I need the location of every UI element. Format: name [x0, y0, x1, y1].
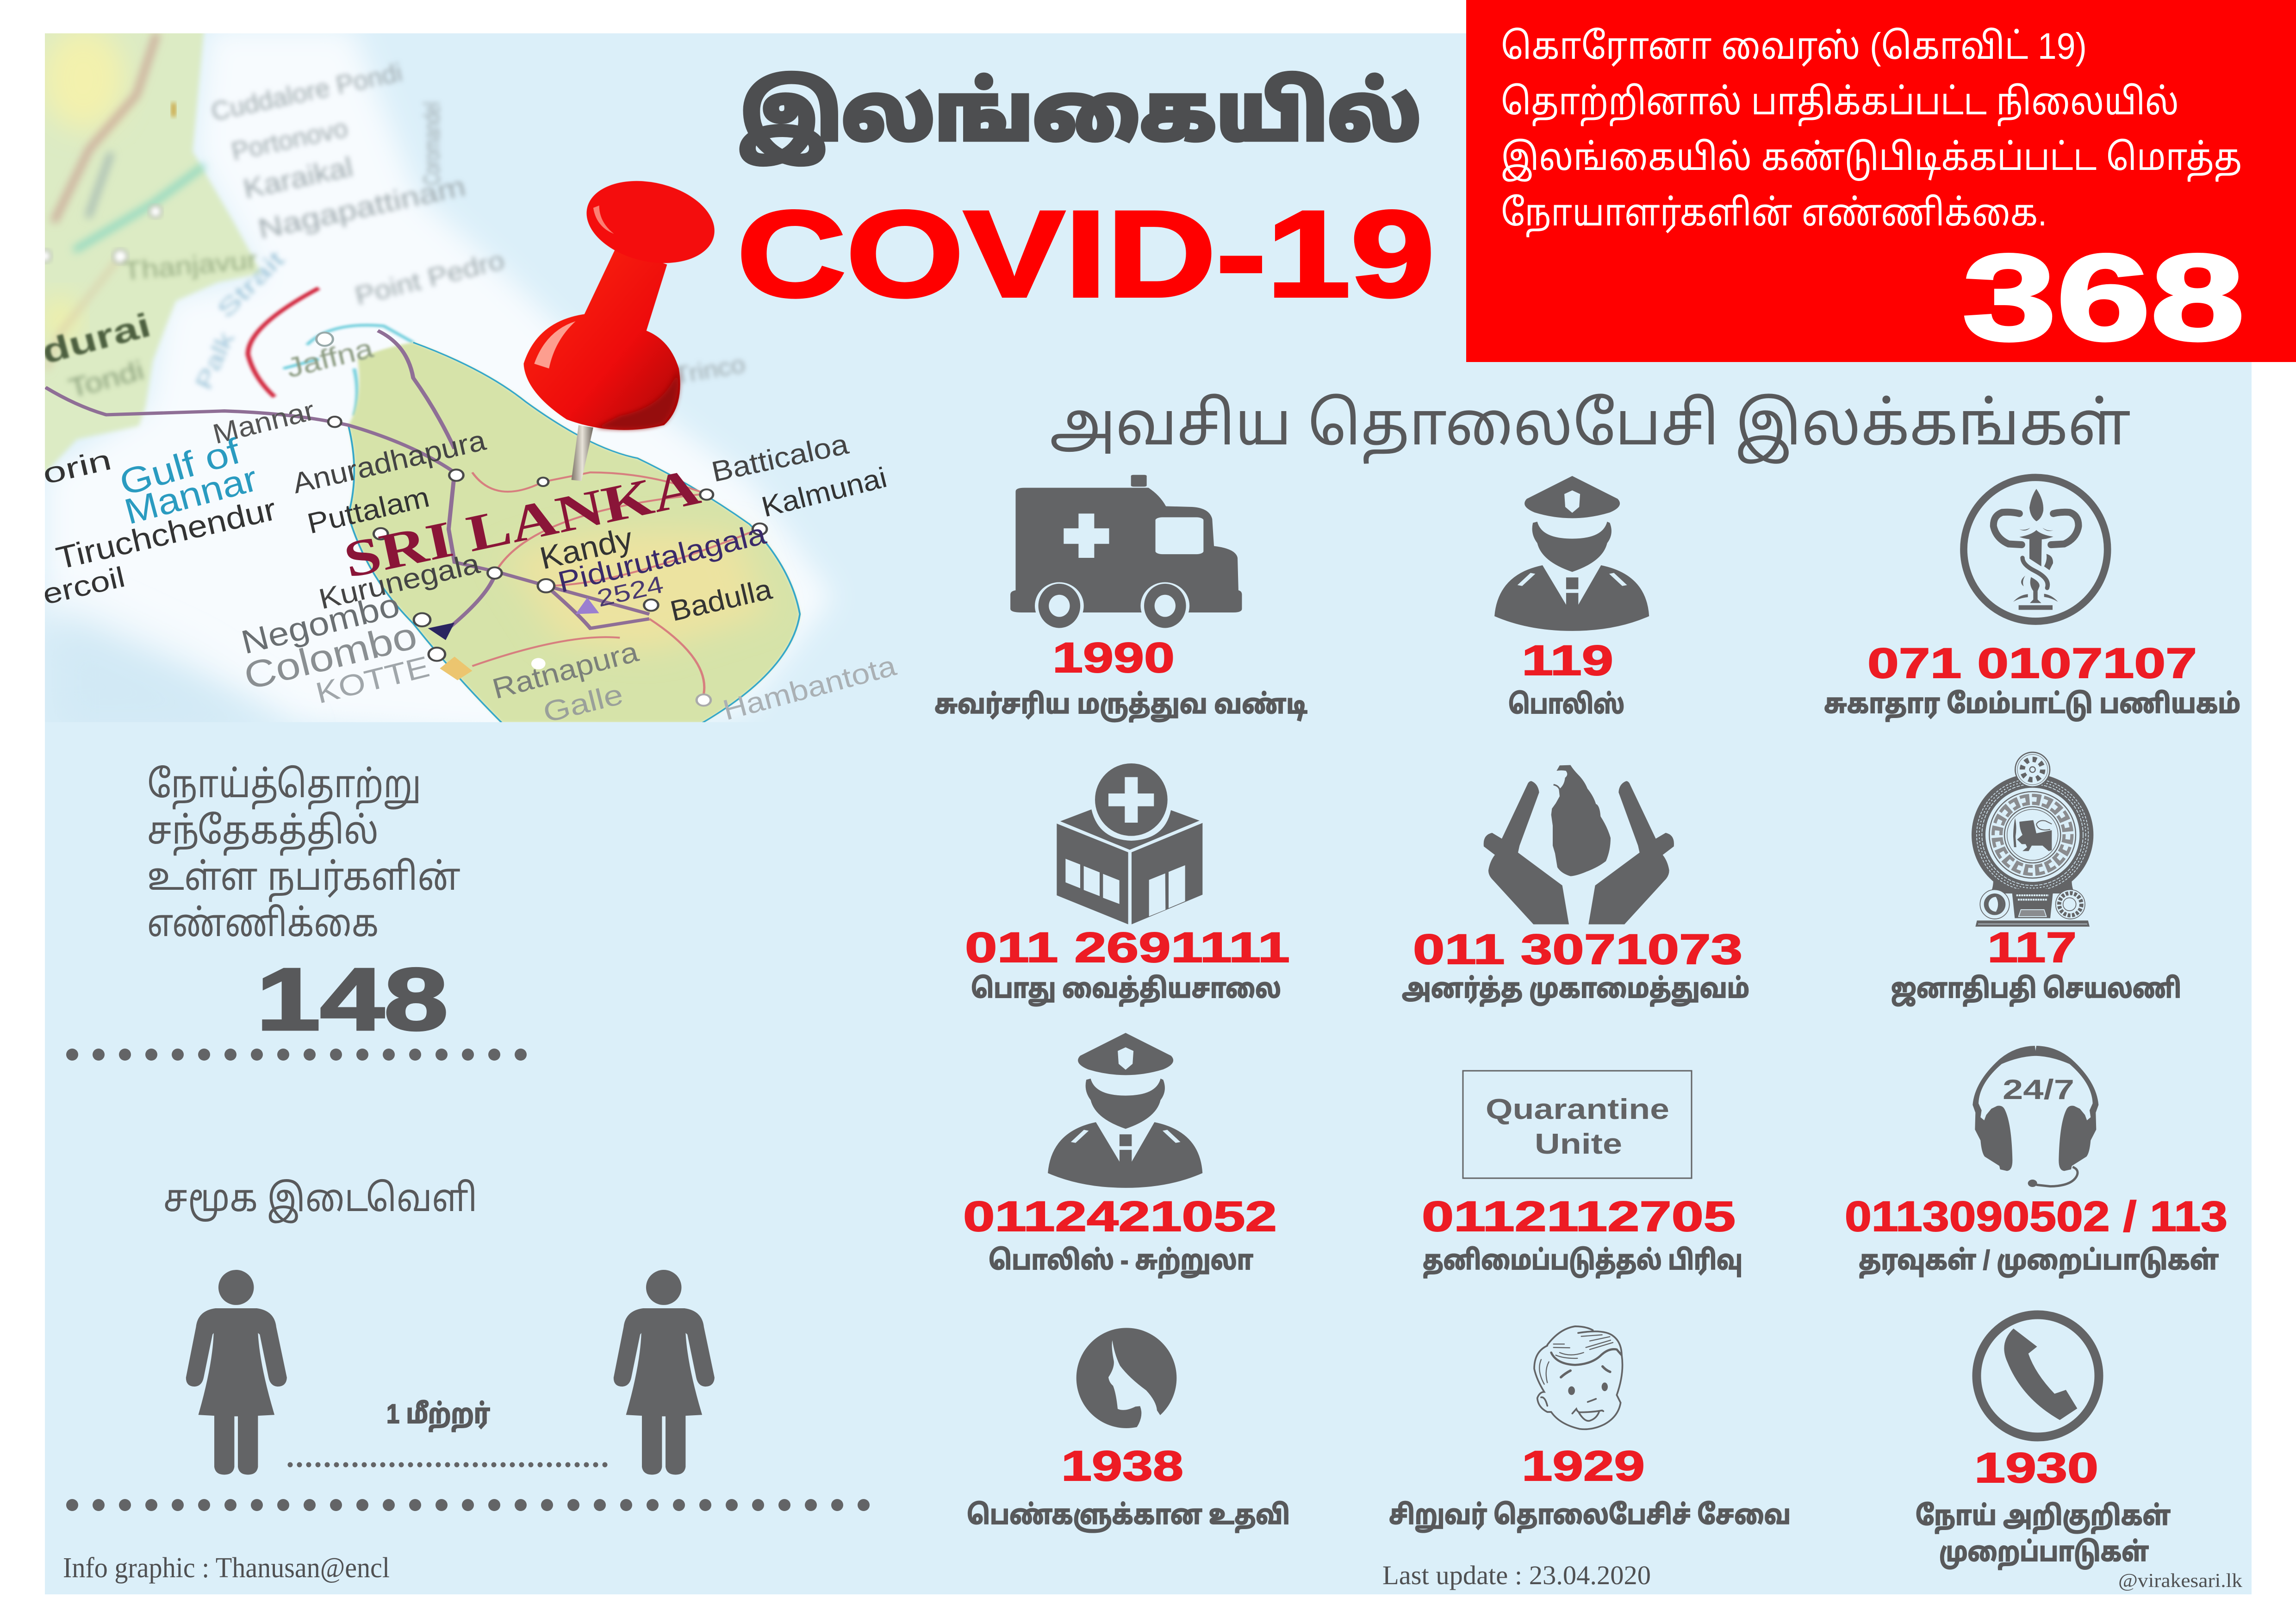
quarantine unit box: [1463, 1071, 1692, 1178]
label: ambulance: சுவர்சரிய மருத்துவ வண்டி: [934, 689, 1307, 722]
number: 117: 117: [1987, 924, 2077, 971]
icon: national emblem: [1972, 752, 2093, 927]
label: general hospital: பொது வைத்தியசாலை: [971, 974, 1281, 1006]
blurred place labels: Palk: [190, 327, 239, 394]
suspected persons label: நோய்த்தொற்று: [147, 763, 421, 810]
map labels: Anuradhapura: [290, 424, 489, 500]
panel: total cases red box: [1466, 0, 2296, 366]
heading: emergency numbers: அவசிய தொலைபேசி இலக்கங்கள்: [1050, 390, 2131, 464]
suspected persons label: எண்ணிக்கை: [147, 902, 379, 944]
blurred place labels: Trinco: [672, 351, 747, 390]
map labels: Mannar: [210, 394, 317, 450]
map labels: Jaffna: [283, 333, 376, 384]
label: quarantine unit: தனிமைப்படுத்தல் பிரிவு: [1423, 1245, 1742, 1278]
total cases description: இலங்கையில் கண்டுபிடிக்கப்பட்ட மொத்த: [1501, 137, 2242, 182]
label: health promotion bureau: சுகாதார மேம்பாட்டு பணியகம்: [1824, 689, 2240, 721]
quarantine unit box: Quarantine: [1486, 1093, 1669, 1125]
blurred place labels: Tondi: [66, 355, 147, 404]
label: child helpline: சிறுவர் தொலைபேசிச் சேவை: [1389, 1500, 1791, 1533]
map labels: Batticaloa: [709, 428, 852, 488]
blurred place labels: Portonovo: [229, 113, 350, 166]
icon: woman profile: [1076, 1328, 1176, 1429]
number: 0112112705: 0112112705: [1422, 1193, 1736, 1240]
suspected persons label: உள்ள நபர்களின்: [147, 856, 460, 902]
source handle: @virakesari.lk: [2118, 1570, 2242, 1592]
number: 071 0107107: 071 0107107: [1867, 640, 2197, 687]
map labels: durai: [37, 306, 155, 371]
blurred place labels: Strait: [212, 246, 289, 323]
number: 0113090502 / 113: 0113090502 / 113: [1845, 1193, 2228, 1240]
label: police tourism: பொலிஸ் - சுற்றுலா: [989, 1245, 1253, 1278]
map labels: ercoil: [40, 561, 128, 611]
map labels: Puttalam: [305, 481, 432, 540]
icon: caduceus in circle: [1964, 477, 2108, 621]
map labels: orin: [40, 444, 114, 491]
figure: woman right: [614, 1270, 715, 1474]
number: 011 2691111: 011 2691111: [965, 924, 1290, 971]
blurred place labels: Karaikal: [241, 151, 355, 205]
social distancing heading: சமூக இடைவெளி: [163, 1177, 477, 1223]
label: disaster management: அனர்த்த முகாமைத்துவம்: [1402, 974, 1749, 1006]
total cases description: [1501, 25, 2242, 237]
credit: info graphic: Info graphic : Thanusan@encl: [63, 1552, 390, 1584]
number: 1930: 1930: [1974, 1444, 2098, 1492]
distance label: 1 மீற்றர்: [386, 1399, 490, 1432]
suspected persons label: [147, 763, 460, 944]
map labels: Hambantota: [720, 650, 900, 727]
icon: 24/7 headset: 24/7: [2003, 1074, 2074, 1105]
map labels: Kandy: [536, 521, 636, 576]
map labels: Kalmunai: [759, 462, 890, 524]
map labels: SRI LANKA: [339, 458, 705, 589]
icon: boy face: [1534, 1326, 1623, 1429]
number: 1990: 1990: [1052, 634, 1175, 681]
map labels: Badulla: [667, 573, 775, 628]
total cases description: நோயாளர்களின் எண்ணிக்கை.: [1501, 192, 2047, 237]
map labels: [37, 306, 900, 729]
map labels: 2524: [595, 571, 666, 612]
Jaffna peninsula outline: [283, 325, 413, 416]
label: symptom complaints: நோய் அறிகுறிகள்: [1916, 1501, 2171, 1534]
number: 1938: 1938: [1061, 1443, 1183, 1490]
suspected persons label: சந்தேகத்தில்: [147, 810, 379, 856]
label: information and complaints: தரவுகள் / முறைப்பாடுகள்: [1859, 1245, 2219, 1278]
label: police: பொலிஸ்: [1508, 689, 1624, 719]
total cases description: தொற்றினால் பாதிக்கப்பட்ட நிலையில்: [1501, 81, 2179, 126]
icon: ambulance: [1010, 475, 1242, 630]
label: symptom complaints: [1916, 1501, 2171, 1570]
label: symptom complaints: முறைப்பாடுகள்: [1939, 1537, 2149, 1570]
suspected persons number: 148: [256, 950, 448, 1049]
map of Sri Lanka with pin: [37, 28, 900, 741]
map labels: Tiruchchendur: [53, 491, 280, 576]
title: COVID-19: COVID-19: [737, 186, 1435, 323]
icon: police officer: [1494, 476, 1649, 631]
map labels: KOTTE: [312, 650, 433, 710]
figure: woman left: [186, 1270, 287, 1474]
sea glow: [45, 28, 833, 741]
number: 119: 119: [1522, 637, 1613, 684]
blurred place labels: Thanjavur: [122, 245, 258, 286]
title: Tamil: இலங்கையில்: [740, 69, 1421, 164]
number: 1929: 1929: [1522, 1443, 1645, 1490]
icon: 24/7 headset: [1972, 1046, 2098, 1187]
label: help for women: பெண்களுக்கான உதவி: [967, 1500, 1290, 1533]
total cases description: கொரோனா வைரஸ் (கொவிட் 19): [1501, 25, 2087, 67]
map labels: Mannar: [120, 458, 261, 532]
map labels: Kurunegala: [316, 548, 483, 616]
blurred place labels: [66, 57, 747, 404]
icon: tourist police officer: [1048, 1033, 1202, 1188]
panel: suspected persons: [72, 763, 523, 1055]
map labels: Ratnapura: [489, 636, 642, 706]
map labels: Colombo: [240, 614, 421, 698]
icon: hospital: [1057, 763, 1202, 924]
blurred place labels: Coromandel: [419, 102, 445, 185]
icon: telephone in circle: [1977, 1315, 2099, 1437]
blurred place labels: Cuddalore Pondi: [208, 57, 404, 126]
map labels: Pidurutalagala: [554, 517, 769, 599]
map labels: Gulf of: [115, 430, 245, 503]
number: 0112421052: 0112421052: [963, 1193, 1277, 1240]
label: presidential secretariat: ஜனாதிபதி செயலணி: [1891, 974, 2181, 1006]
number: 011 3071073: 011 3071073: [1413, 926, 1742, 973]
icon: hands holding Sri Lanka: [1484, 765, 1674, 924]
last update: Last update : 23.04.2020: [1382, 1560, 1651, 1590]
map labels: Galle: [540, 678, 626, 729]
panel: social distancing: [72, 1177, 865, 1505]
total cases number: 368: [1962, 229, 2245, 366]
blurred place labels: Point Pedro: [352, 245, 507, 311]
map labels: Negombo: [238, 586, 404, 662]
Indian mainland: [37, 28, 261, 477]
blurred place labels: Nagapattinam: [255, 170, 468, 245]
quarantine unit box: Unite: [1535, 1128, 1622, 1160]
